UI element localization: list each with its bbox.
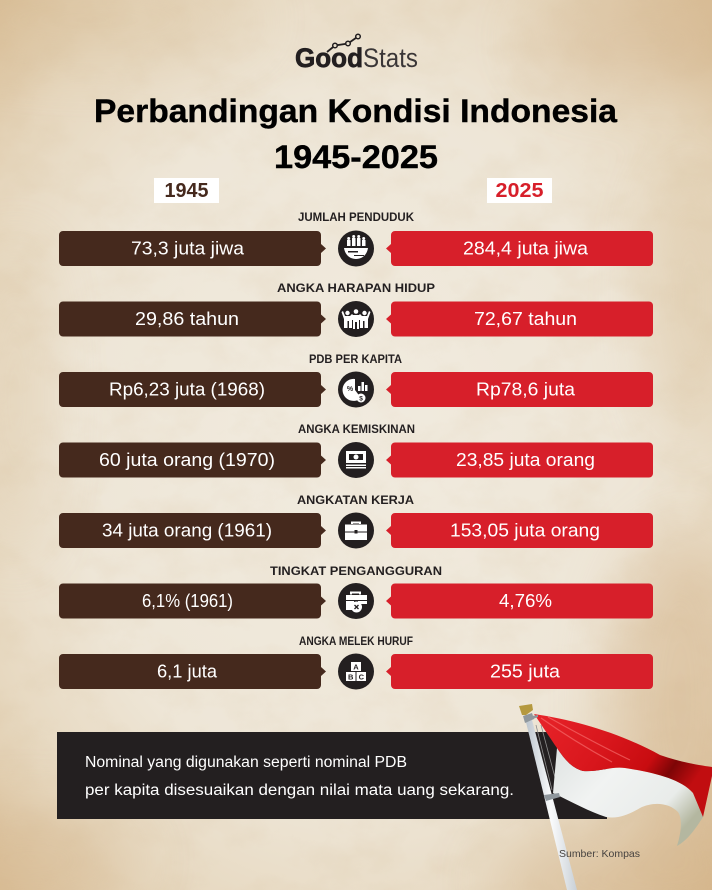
icon: money stack (338, 442, 374, 478)
row: tingkat pengangguran: 6,1% (1961) (142, 591, 233, 611)
row: pdb per kapita: PDB PER KAPITA (309, 354, 402, 366)
row: pdb per kapita (59, 354, 653, 408)
flag illustration (519, 704, 712, 890)
column header: 1945 (154, 178, 219, 203)
icon: gdp chart (338, 372, 374, 408)
row: angkatan kerja: 153,05 juta orang (450, 520, 600, 540)
note panel: Nominal yang digunakan seperti nominal PDB (85, 754, 407, 771)
row: angka melek huruf: 6,1 juta (157, 662, 218, 682)
column header: 1945: 1945 (164, 180, 208, 202)
icon: abc blocks: A (353, 662, 359, 672)
row: angka harapan hidup: 29,86 tahun (135, 309, 239, 329)
row: tingkat pengangguran: TINGKAT PENGANGGURAN (270, 566, 442, 578)
icon: gdp chart: $ (359, 396, 363, 402)
icon: abc blocks: C (359, 672, 365, 682)
logo: GoodStats: Good (295, 43, 363, 73)
flag: pole collars (523, 713, 534, 723)
note panel (57, 732, 607, 819)
title: Perbandingan Kondisi Indonesia (94, 93, 617, 129)
title: 1945-2025 (274, 139, 438, 175)
row: tingkat pengangguran (59, 566, 653, 619)
row: angkatan kerja: 34 juta orang (1961) (102, 520, 272, 540)
flag: ropes (536, 725, 557, 790)
row: angka kemiskinan: 23,85 juta orang (456, 450, 595, 470)
icon: raised arms people (338, 301, 374, 337)
row: angka harapan hidup: ANGKA HARAPAN HIDUP (277, 283, 435, 295)
flag: highlights (541, 717, 630, 762)
row: jumlah penduduk: 73,3 juta jiwa (131, 238, 245, 258)
row: angka kemiskinan (59, 424, 653, 478)
column header: 2025: 2025 (496, 180, 544, 202)
row: jumlah penduduk (59, 212, 653, 266)
flag: red band (534, 714, 712, 817)
logo: GoodStats (295, 34, 418, 73)
row: tingkat pengangguran: 4,76% (499, 591, 552, 611)
flag: pole (525, 716, 577, 890)
row: angka melek huruf: ANGKA MELEK HURUF (299, 636, 413, 648)
row: angka harapan hidup (59, 283, 653, 337)
note panel: per kapita disesuaikan dengan nilai mata uang sekarang. (85, 782, 514, 799)
icon: population (338, 230, 374, 266)
icon: abc blocks: B (348, 672, 354, 682)
flag: white band (553, 748, 703, 846)
icon: unemployment briefcase (338, 583, 374, 619)
flag: finial (519, 704, 533, 715)
column header: 2025 (487, 178, 552, 203)
source credit: Sumber: Kompas (559, 848, 640, 860)
title (94, 93, 617, 175)
row: jumlah penduduk: JUMLAH PENDUDUK (298, 212, 415, 224)
row: pdb per kapita: Rp6,23 juta (1968) (109, 380, 265, 400)
row: angka melek huruf: 255 juta (490, 662, 561, 682)
row: angka melek huruf (59, 636, 653, 690)
row: angkatan kerja: ANGKATAN KERJA (297, 495, 414, 507)
row: angka kemiskinan: ANGKA KEMISKINAN (298, 424, 415, 436)
row: angkatan kerja (59, 495, 653, 548)
icon: briefcase (338, 512, 374, 548)
logo: GoodStats: Stats (363, 43, 418, 73)
icon: abc blocks (338, 654, 374, 690)
row: angka kemiskinan: 60 juta orang (1970) (99, 450, 275, 470)
row: jumlah penduduk: 284,4 juta jiwa (463, 238, 589, 258)
row: pdb per kapita: Rp78,6 juta (476, 380, 576, 400)
row: angka harapan hidup: 72,67 tahun (474, 309, 577, 329)
icon: gdp chart: % (347, 386, 354, 393)
